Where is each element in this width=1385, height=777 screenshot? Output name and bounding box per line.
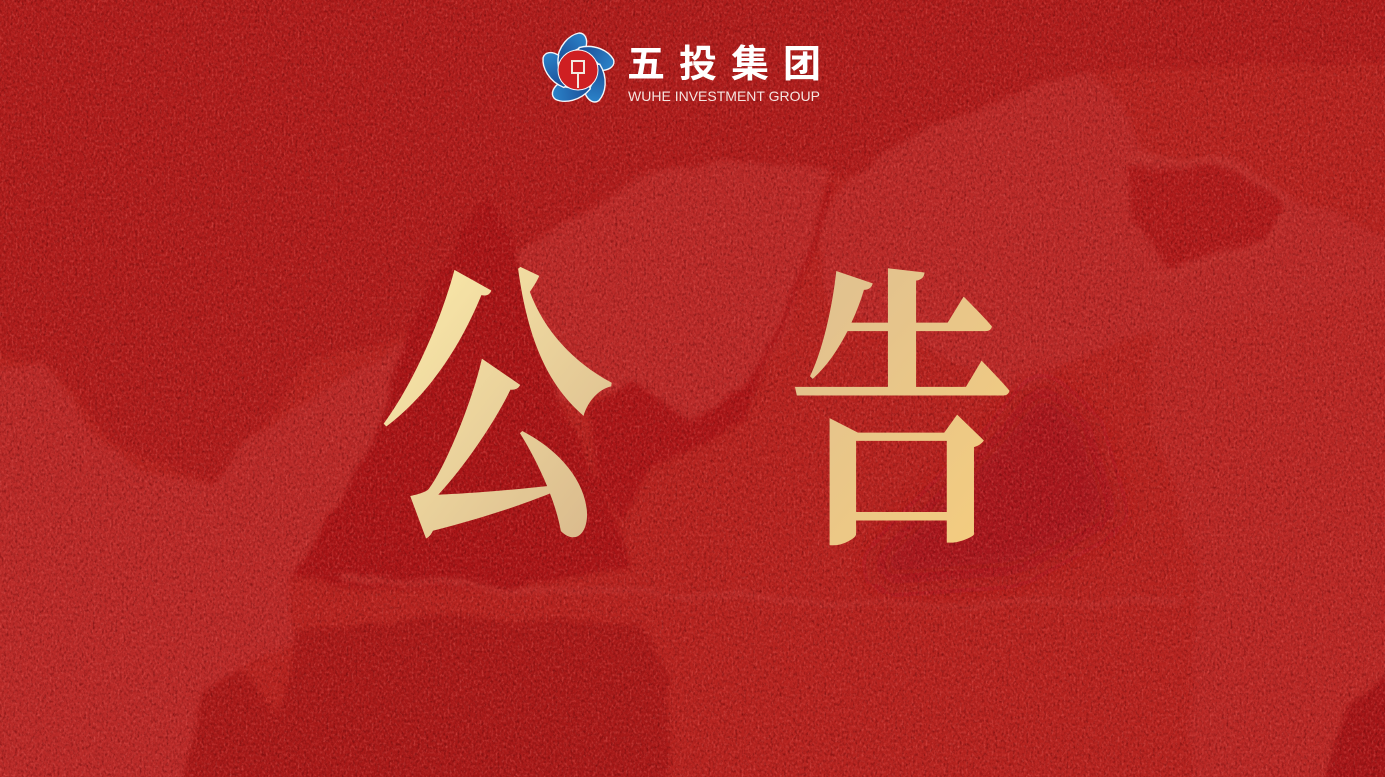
title: 告: 告 (787, 257, 1017, 584)
company name in English: WUHE INVESTMENT GROUP (628, 88, 820, 104)
title: 公: 公 (379, 250, 615, 580)
icon: five-blade emblem (536, 33, 617, 112)
logo (536, 33, 821, 112)
company name in Chinese: 五投集团 (627, 33, 821, 88)
